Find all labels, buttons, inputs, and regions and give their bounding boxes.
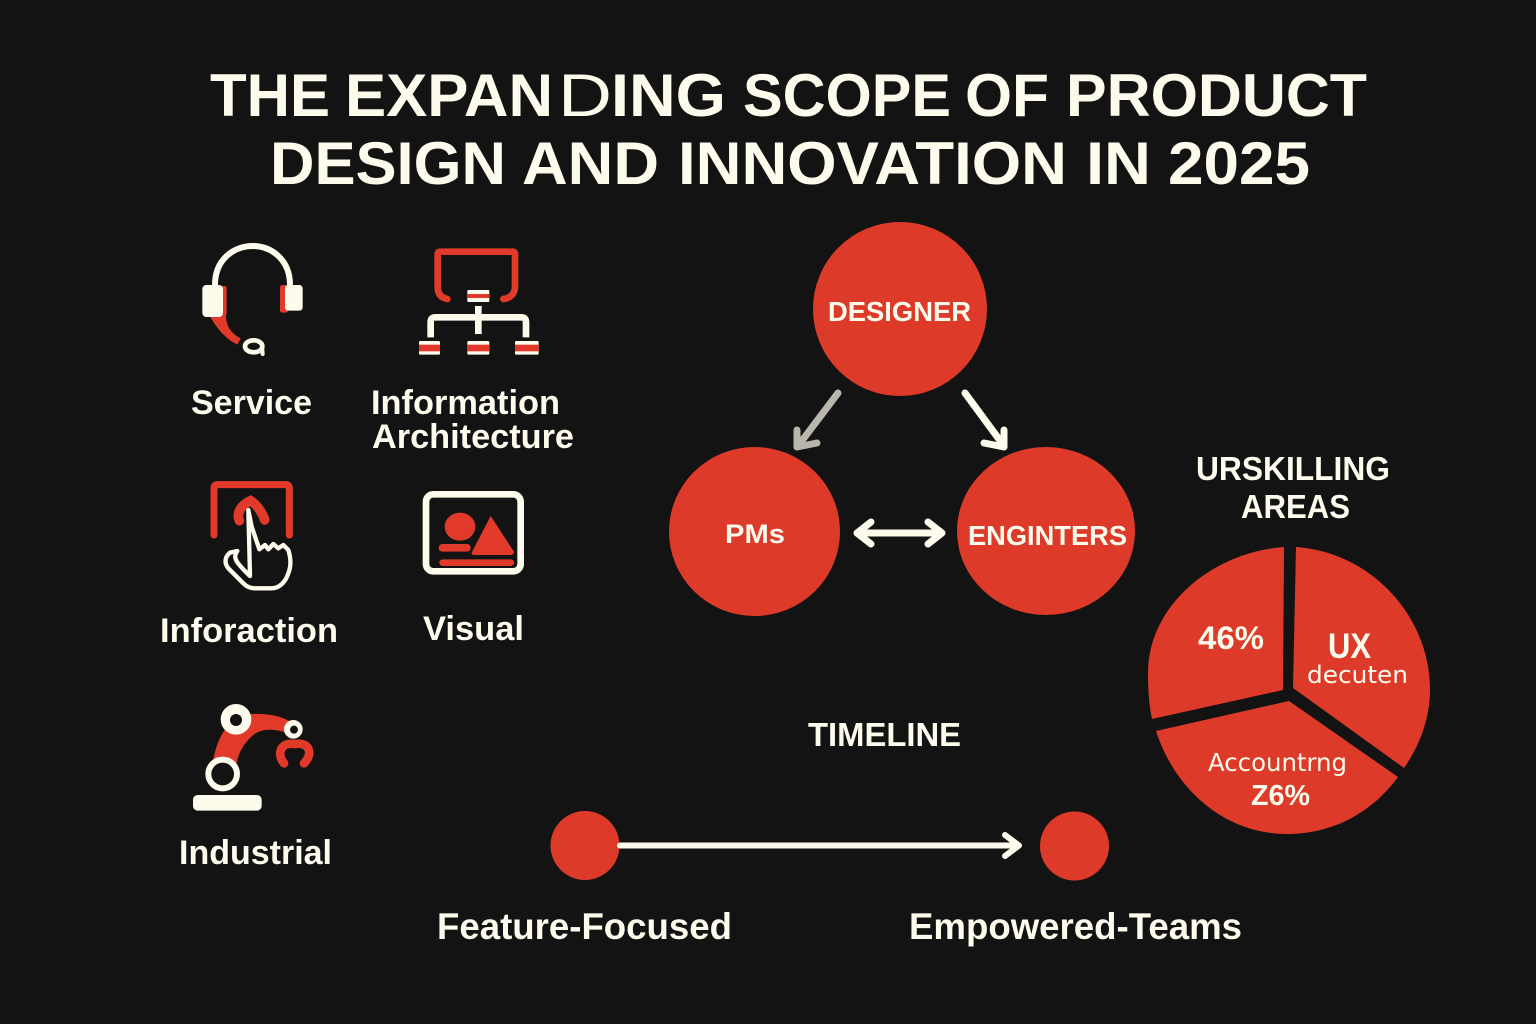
title: IN [1086,130,1151,197]
slice: accounting: Z6% [1251,780,1310,812]
slice: 46%: 46% [1198,620,1264,656]
label: Industrial: Industrial [179,834,332,872]
icon: interaction hand [214,485,290,588]
icon: visual frame [426,494,521,571]
slice: UX: decuten [1307,661,1408,689]
label: Information Architecture [371,384,574,456]
node: designer [813,222,987,396]
slice: UX [1293,547,1430,768]
title: DESIGN [270,130,506,197]
slice: UX: UX [1328,627,1372,666]
label: Inforaction: Inforaction [160,612,338,650]
title: INNOVATION [678,130,1067,197]
label: Information Architecture: Architecture [372,418,574,456]
icon: information architecture [419,252,539,355]
label: Empowered-Teams: Empowered-Teams [909,906,1242,947]
node: engineers: ENGINTERS [968,520,1127,551]
label: Service: Service [191,384,312,422]
node: PMs: PMs [725,519,785,549]
title: D [558,62,612,129]
title [210,62,1367,197]
icon: service headset [202,246,303,354]
pie chart: upskilling areas [1148,547,1430,834]
title: PRODUCT [1066,62,1367,129]
slice: accounting: Accountrng [1208,748,1347,777]
heading: timeline: TIMELINE [808,716,961,753]
title: AND [522,130,659,197]
node: engineers [957,447,1135,615]
slice: 46% [1148,547,1284,719]
title: THE [210,62,330,129]
icon: industrial robot arm [193,704,309,811]
label: Feature-Focused: Feature-Focused [437,906,732,947]
node: PMs [669,447,840,616]
title: OF [965,62,1049,129]
title: 2025 [1168,130,1310,197]
arrow: timeline [620,835,1019,856]
heading: upskilling areas: URSKILLING [1196,450,1390,487]
label: Information Architecture: Information [371,384,560,422]
arrow: PMs and engineers two-way [857,522,942,544]
label: Visual: Visual [423,610,524,648]
title: SCOPE [743,62,951,129]
slice: accounting [1156,701,1398,834]
heading: upskilling areas [1196,450,1390,525]
arrow: designer to engineers [965,393,1004,447]
timeline end dot [1040,812,1109,880]
title: EXPAN [345,62,553,129]
title: ING [611,62,726,129]
arrow: designer to PMs [797,393,838,447]
node: designer: DESIGNER [828,296,971,327]
timeline start dot [550,811,620,880]
heading: upskilling areas: AREAS [1241,488,1350,525]
